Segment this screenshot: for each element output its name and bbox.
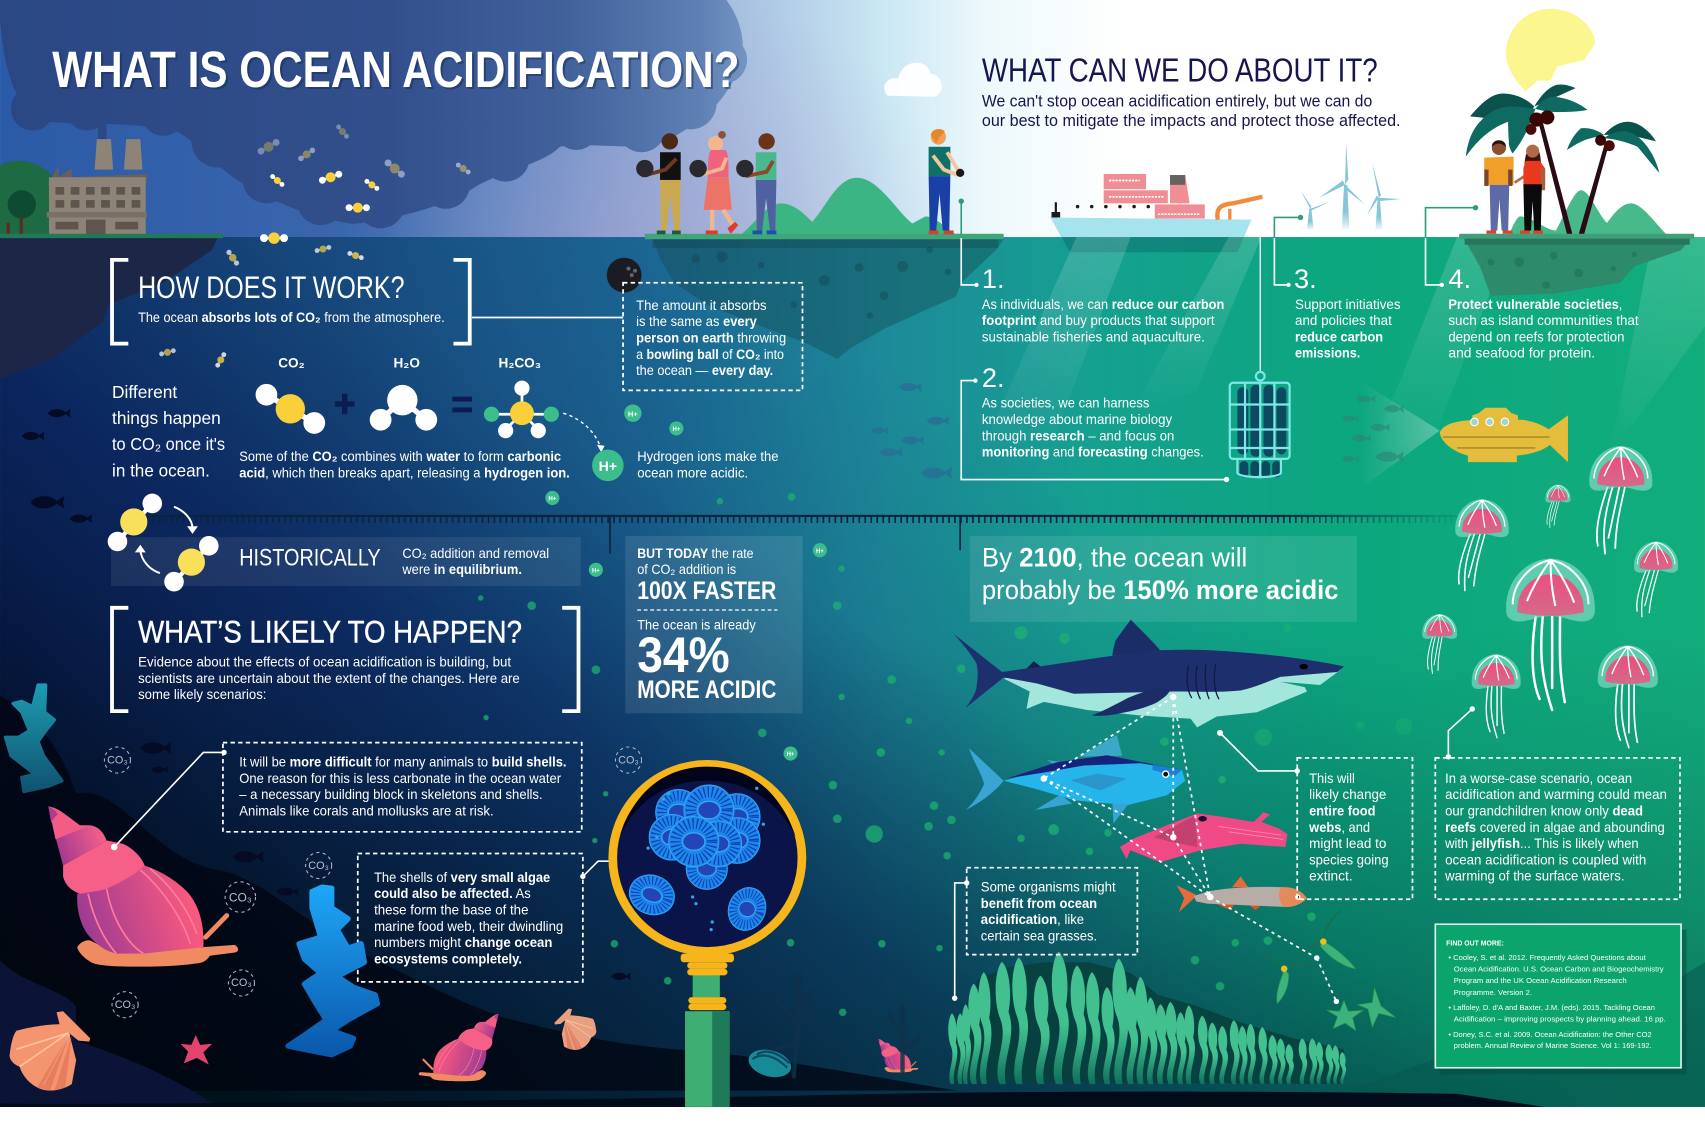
different things text: Different <box>112 382 177 402</box>
callout: worse-case scenario: our grandchildren know only dead <box>1445 802 1643 818</box>
numbered action 2: knowledge about marine biology <box>982 411 1173 427</box>
teal coral <box>5 685 62 792</box>
factory <box>47 139 147 235</box>
CO3 ions <box>104 747 642 1018</box>
light beams <box>979 237 1705 457</box>
numbered action 4: and seafood for protein. <box>1448 345 1595 361</box>
tiny snail <box>878 1039 918 1072</box>
title: WHAT IS OCEAN ACIDIFICATION? <box>54 43 742 100</box>
what can we do about it <box>982 52 1401 130</box>
numbered action 3: 3. <box>1294 263 1317 294</box>
scallop shell large <box>10 1011 90 1091</box>
callout: build shells: – a necessary building block in skeletons and shells. <box>239 786 543 802</box>
hydrogen ions text: Hydrogen ions make the <box>637 448 779 464</box>
callout: build shells <box>111 743 582 850</box>
palm trees <box>1466 85 1659 234</box>
person on right shore <box>929 129 964 234</box>
numbered action 2: 2. <box>982 362 1005 393</box>
but today stat box <box>625 536 802 713</box>
find out more references: Acidification – improving prospects by planning ahead. 16 pp. <box>1454 1015 1666 1024</box>
numbered action 1: As individuals, we can reduce our carbon <box>982 296 1224 312</box>
numbered action 3: and policies that <box>1295 312 1392 328</box>
but today stat box: 100X FASTER <box>637 577 776 605</box>
sun <box>1506 9 1595 91</box>
callout: small algae: numbers might change ocean <box>374 934 552 950</box>
H+ ions <box>545 404 827 761</box>
mountains centre <box>741 178 957 235</box>
whats likely heading: WHAT’S LIKELY TO HAPPEN? <box>138 614 522 650</box>
but today stat box: of CO₂ addition is <box>637 561 736 577</box>
callout: small algae: marine food web, their dwindling <box>374 918 563 934</box>
smoke cloud <box>0 0 747 228</box>
but today stat box: 34% <box>637 627 730 683</box>
H+ ions: H+ <box>628 409 638 418</box>
plankton <box>1262 910 1396 1031</box>
historically band <box>111 537 581 586</box>
numbered action 4: depend on reefs for protection <box>1448 328 1625 344</box>
find out more references: • Cooley, S. et al. 2012. Frequently Asked Questions about <box>1448 953 1647 962</box>
historically band: were in equilibrium. <box>401 561 522 577</box>
small cloud <box>884 63 942 97</box>
title: WHAT IS OCEAN ACIDIFICATION? <box>52 41 739 98</box>
CO2 molecules rising <box>158 123 472 369</box>
callout: small algae: these form the base of the <box>374 901 529 917</box>
find out more references: • Laffoley, D. d'A and Baxter, J.M. (eds). 2015. Tackling Ocean <box>1448 1003 1655 1012</box>
big snail <box>48 806 238 967</box>
carbonic acid text <box>239 448 570 480</box>
but today stat box: MORE ACIDIC <box>637 676 776 704</box>
chemical equation: H+ <box>599 458 617 474</box>
CO3 ions: CO₃ <box>115 999 135 1011</box>
whats likely heading: some likely scenarios: <box>138 686 266 702</box>
blue coral <box>288 887 377 1055</box>
callout: benefit organisms: certain sea grasses. <box>981 928 1097 944</box>
callout: food webs: species going <box>1309 851 1389 867</box>
equilibrium molecules <box>108 494 219 592</box>
blue fish school <box>871 383 952 479</box>
people with bowling balls <box>636 131 776 234</box>
callout: small algae: The shells of very small algae <box>374 869 550 885</box>
hydrogen ions text: ocean more acidic. <box>637 464 748 480</box>
bowling ball callout: a bowling ball of CO₂ into <box>636 346 784 362</box>
find out more references <box>1435 924 1686 1074</box>
starfish <box>181 1035 212 1064</box>
numbered action 4: such as island communities that <box>1448 312 1639 328</box>
numbered action 3: reduce carbon <box>1295 328 1383 344</box>
H+ ions: H+ <box>787 752 795 758</box>
tuna <box>966 735 1185 824</box>
callout: build shells: It will be more difficult for many animals to build shells. <box>239 754 567 770</box>
H+ ions: H+ <box>592 568 600 574</box>
different things text: to CO₂ once it's <box>112 434 225 454</box>
numbered action 1: 1. <box>982 263 1005 294</box>
numbered action 3 <box>1274 215 1401 361</box>
icon: bowling ball <box>607 258 642 292</box>
numbered action 3: Support initiatives <box>1295 296 1401 312</box>
find out more references: Ocean Acidification. U.S. Ocean Carbon and Biogeochemistry <box>1454 965 1664 974</box>
whats likely heading: scientists are uncertain about the extent of the changes. Here are <box>138 670 520 686</box>
numbered action 4 <box>1426 205 1639 361</box>
callout: build shells: One reason for this is less carbonate in the ocean water <box>239 770 561 786</box>
what can we do about it: WHAT CAN WE DO ABOUT IT? <box>982 52 1378 90</box>
submarine <box>1342 381 1568 489</box>
research cage <box>1230 237 1290 478</box>
find out more references: Programme. Version 2. <box>1454 988 1532 997</box>
callout: food webs <box>1217 730 1412 899</box>
chemical equation: H₂O <box>393 356 420 371</box>
callout: benefit organisms <box>952 868 1137 1001</box>
callout: food webs: likely change <box>1309 786 1387 802</box>
bowling ball callout <box>623 283 802 390</box>
callout: food webs: This will <box>1309 770 1355 786</box>
numbered action 1: footprint and buy products that support <box>982 312 1215 328</box>
CO3 ions: CO₃ <box>618 754 639 766</box>
squid <box>1120 812 1287 862</box>
callout: worse-case scenario: reefs covered in algae and abounding <box>1445 819 1665 835</box>
callout: food webs: might lead to <box>1309 835 1387 851</box>
dark coral silhouettes <box>774 973 919 1076</box>
hydrogen ions text <box>637 448 779 480</box>
callout: small algae: could also be affected. As <box>374 885 531 901</box>
ocean water <box>0 237 1705 1107</box>
mountains right island <box>1509 190 1667 235</box>
callout: build shells: Animals like corals and mollusks are at risk. <box>239 802 494 818</box>
callout: food webs: webs, and <box>1308 819 1370 835</box>
numbered action 4: Protect vulnerable societies, <box>1448 296 1622 312</box>
numbered action 1 <box>959 198 1224 344</box>
but today stat box: BUT TODAY the rate <box>637 545 754 561</box>
by 2100 headline: By 2100, the ocean will <box>982 542 1247 573</box>
numbered action 2: through research – and focus on <box>982 427 1174 443</box>
wind turbines <box>1300 142 1401 229</box>
left cliff <box>0 234 223 379</box>
bowling ball callout: is the same as every <box>636 313 757 329</box>
callout: worse-case scenario: with jellyfish... This is likely when <box>1444 835 1639 851</box>
different things text: things happen <box>112 408 221 428</box>
find out more references: problem. Annual Review of Marine Science. Vol 1: 169-192. <box>1454 1041 1652 1050</box>
numbered action 2: monitoring and forecasting changes. <box>982 444 1204 460</box>
food web connections <box>1041 694 1339 1004</box>
carbonic acid text: acid, which then breaks apart, releasing a hydrogen ion. <box>239 464 570 480</box>
chemical equation: H₂CO₃ <box>499 356 541 371</box>
small fish <box>1177 876 1307 912</box>
timeline ruler <box>147 515 1479 553</box>
find out more references: • Doney, S.C. et al. 2009. Ocean Acidification: the Other CO2 <box>1448 1030 1652 1039</box>
H+ ions: H+ <box>672 427 681 433</box>
whats likely heading: Evidence about the effects of ocean acidification is building, but <box>138 654 511 670</box>
seagrass <box>948 952 1346 1084</box>
numbered action 2: As societies, we can harness <box>982 395 1149 411</box>
sky <box>0 0 1705 238</box>
historically band: HISTORICALLY <box>239 544 381 571</box>
right island <box>1459 234 1694 296</box>
historically band: CO₂ addition and removal <box>402 545 549 561</box>
sea floor <box>0 696 1705 1107</box>
callout: worse-case scenario: warming of the surface waters. <box>1444 868 1625 884</box>
callout: food webs: extinct. <box>1309 868 1353 884</box>
numbered action 1: sustainable fisheries and aquaculture. <box>982 328 1205 344</box>
couple on island <box>1484 140 1545 234</box>
CO3 ions: CO₃ <box>231 977 252 989</box>
bowling ball callout: person on earth throwing <box>636 330 786 346</box>
callout: small algae: ecosystems completely. <box>374 950 522 966</box>
callout: food webs: entire food <box>1309 802 1376 818</box>
different things text: in the ocean. <box>112 460 210 480</box>
find out more references: Program and the UK Ocean Acidification Research <box>1454 976 1627 985</box>
small snail <box>419 1014 498 1081</box>
shark <box>954 620 1344 727</box>
how does it work heading: The ocean absorbs lots of CO₂ from the atmosphere. <box>138 309 445 325</box>
magnifying glass with coccoliths <box>613 764 802 1107</box>
bowling ball callout: The amount it absorbs <box>636 297 767 313</box>
trees <box>0 161 64 252</box>
but today stat box: The ocean is already <box>637 617 757 633</box>
by 2100 headline <box>970 536 1357 622</box>
different things text <box>112 382 225 480</box>
numbered action 4: 4. <box>1448 263 1471 294</box>
mussel <box>745 1045 794 1082</box>
what can we do about it: our best to mitigate the impacts and protect those affected. <box>982 111 1401 130</box>
what can we do about it: We can't stop ocean acidification entirely, but we can do <box>982 92 1372 111</box>
by 2100 headline: probably be 150% more acidic <box>982 574 1339 605</box>
ship <box>1050 174 1262 237</box>
H+ ions: H+ <box>816 549 824 555</box>
callout: benefit organisms: Some organisms might <box>981 879 1116 895</box>
callout: benefit organisms: acidification, like <box>981 911 1084 927</box>
middle island <box>645 234 1005 359</box>
jellyfish swarm <box>1422 446 1678 748</box>
H+ ions: H+ <box>548 497 557 503</box>
whats likely heading <box>112 608 578 711</box>
scallop shell small <box>554 1009 596 1050</box>
how does it work heading <box>112 260 623 344</box>
CO3 ions: CO₃ <box>229 890 252 904</box>
callout: small algae <box>358 854 648 982</box>
chemical equation <box>256 356 624 481</box>
callout: worse-case scenario: acidification and warming could mean <box>1445 786 1667 802</box>
chemical equation: CO₂ <box>278 356 305 371</box>
callout: benefit organisms: benefit from ocean <box>981 895 1097 911</box>
how does it work heading: HOW DOES IT WORK? <box>138 269 405 305</box>
callout: worse-case scenario <box>1435 706 1680 899</box>
numbered action 3: emissions. <box>1295 345 1360 361</box>
callout: worse-case scenario: In a worse-case scenario, ocean <box>1445 770 1632 786</box>
numbered action 2 <box>961 362 1229 482</box>
CO3 ions: CO₃ <box>308 860 329 872</box>
ship hull shadow <box>1061 237 1244 252</box>
black fish silhouettes <box>22 409 631 980</box>
CO3 ions: CO₃ <box>107 754 128 766</box>
carbonic acid text: Some of the CO₂ combines with water to form carbonic <box>239 448 561 464</box>
green bubbles <box>478 493 1412 1016</box>
bowling ball callout: the ocean — every day. <box>636 362 773 378</box>
callout: worse-case scenario: ocean acidification is coupled with <box>1445 851 1646 867</box>
find out more references: FIND OUT MORE: <box>1446 938 1504 947</box>
